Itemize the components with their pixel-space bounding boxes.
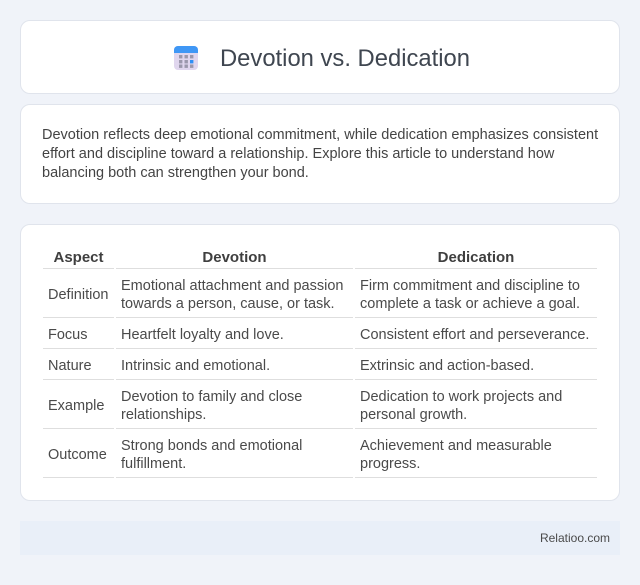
panel: comparison table [20,224,620,501]
panel: introduction [20,104,620,204]
cell: Dedication nature: Extrinsic and action-based. [360,358,534,374]
icon: calendar [174,46,198,70]
cell: Devotion definition: Emotional attachment and passion [121,278,343,294]
footer text: source: Relatioo.com [540,531,610,545]
panel: title card [20,20,620,94]
cell: Dedication outcome: Achievement and measurable [360,438,552,454]
title: Devotion vs. Dedication [220,45,470,72]
cell: Devotion example: Devotion to family and close [121,389,302,405]
cell: Devotion example: relationships. [121,407,206,423]
text block: introduction: Devotion reflects deep emotional commitment, while dedication emphasizes consistent [42,127,598,143]
cell: Devotion focus: Heartfelt loyalty and love. [121,327,284,343]
row label: Nature: Nature [48,358,92,374]
cell: Dedication definition: Firm commitment and discipline to [360,278,580,294]
cell: Devotion nature: Intrinsic and emotional. [121,358,270,374]
cell: Dedication outcome: progress. [360,456,420,472]
text block: introduction: balancing both can strengthen your bond. [42,165,309,181]
row label: Definition: Definition [48,287,108,303]
cell: Dedication example [360,389,562,423]
footer bar [20,521,620,555]
cell: Dedication definition: complete a task or achieve a goal. [360,296,580,312]
cell: Devotion definition [121,278,343,312]
text block: introduction: effort and discipline toward a relationship. Explore this article to understand how [42,146,554,162]
cell: Devotion outcome [121,438,302,472]
row label: Focus: Focus [48,327,88,343]
row label: Example: Example [48,398,104,414]
cell: Devotion outcome: fulfillment. [121,456,186,472]
cell: Dedication definition [360,278,580,312]
row label: Outcome: Outcome [48,447,107,463]
table header: Devotion: Devotion [202,249,267,266]
cell: Devotion example [121,389,302,423]
cell: Dedication focus: Consistent effort and perseverance. [360,327,589,343]
table header: Aspect: Aspect [53,249,104,266]
cell: Dedication example: personal growth. [360,407,467,423]
cell: Devotion outcome: Strong bonds and emotional [121,438,302,454]
cell: Dedication outcome [360,438,552,472]
text block: introduction [42,127,598,181]
cell: Devotion definition: towards a person, cause, or task. [121,296,335,312]
table header: Dedication: Dedication [438,249,514,266]
cell: Dedication example: Dedication to work projects and [360,389,562,405]
